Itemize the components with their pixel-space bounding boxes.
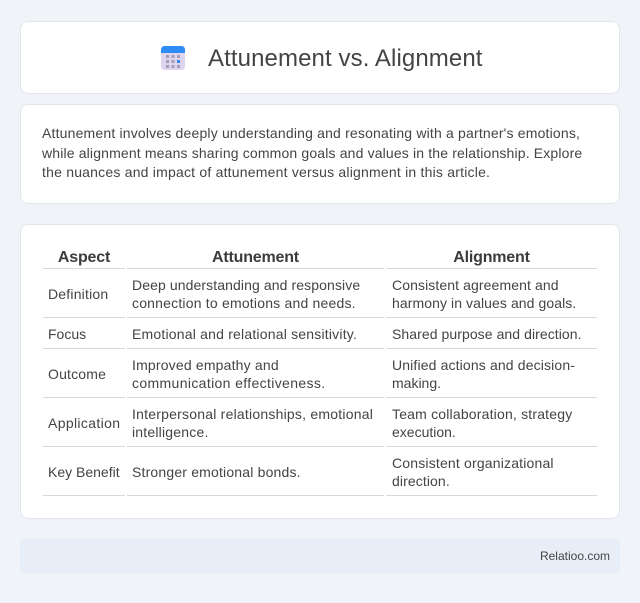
- panel: title header: [20, 21, 620, 94]
- panel: comparison table: Shared purpose and direction.: [392, 326, 582, 342]
- panel: comparison table: Definition: [48, 286, 108, 302]
- panel: comparison table: Improved empathy and: [132, 357, 279, 373]
- panel: comparison table: Outcome: [48, 366, 106, 382]
- panel: comparison table: Attunement: [212, 249, 299, 266]
- panel: comparison table: communication effectiveness.: [132, 375, 325, 391]
- panel: comparison table: harmony in values and goals.: [392, 295, 576, 311]
- panel: comparison table: Application: [48, 415, 120, 431]
- row: key benefit: [48, 455, 554, 489]
- panel: comparison table: Unified actions and decision-: [392, 357, 575, 373]
- row: outcome: [48, 357, 575, 391]
- intro text: the nuances and impact of attunement versus alignment in this article.: [42, 164, 490, 180]
- panel: comparison table: Consistent organizational: [392, 455, 554, 471]
- panel: comparison table: Interpersonal relationships, emotional: [132, 406, 373, 422]
- panel: comparison table: execution.: [392, 424, 456, 440]
- title: Attunement vs. Alignment: [208, 45, 483, 72]
- panel: comparison table: Stronger emotional bonds.: [132, 464, 301, 480]
- panel: comparison table: making.: [392, 375, 441, 391]
- panel: comparison table: Deep understanding and responsive: [132, 277, 360, 293]
- intro text: Attunement involves deeply understanding and resonating with a partner's emotions,: [42, 125, 580, 141]
- row: focus: [48, 326, 582, 342]
- panel: comparison table: Focus: [48, 326, 86, 342]
- row: application: [48, 406, 572, 440]
- row: definition: [48, 277, 576, 311]
- panel: comparison table: Emotional and relational sensitivity.: [132, 326, 357, 342]
- panel: comparison table: intelligence.: [132, 424, 209, 440]
- intro text: while alignment means sharing common goals and values in the relationship. Explore: [42, 144, 582, 160]
- column headings: [58, 249, 530, 266]
- intro text: [42, 125, 582, 180]
- panel: comparison table: Alignment: [453, 249, 530, 266]
- panel: comparison table: Team collaboration, strategy: [392, 406, 572, 422]
- panel: comparison table: direction.: [392, 473, 450, 489]
- icon: calendar: [161, 46, 185, 70]
- footer bar: [20, 539, 620, 573]
- panel: comparison table: Consistent agreement and: [392, 277, 559, 293]
- panel: comparison table: connection to emotions and needs.: [132, 295, 356, 311]
- panel: comparison table: Aspect: [58, 249, 110, 266]
- panel: introduction: [20, 104, 620, 204]
- panel: comparison table: Key Benefit: [48, 464, 120, 480]
- footer text: Relatioo.com: [540, 549, 610, 563]
